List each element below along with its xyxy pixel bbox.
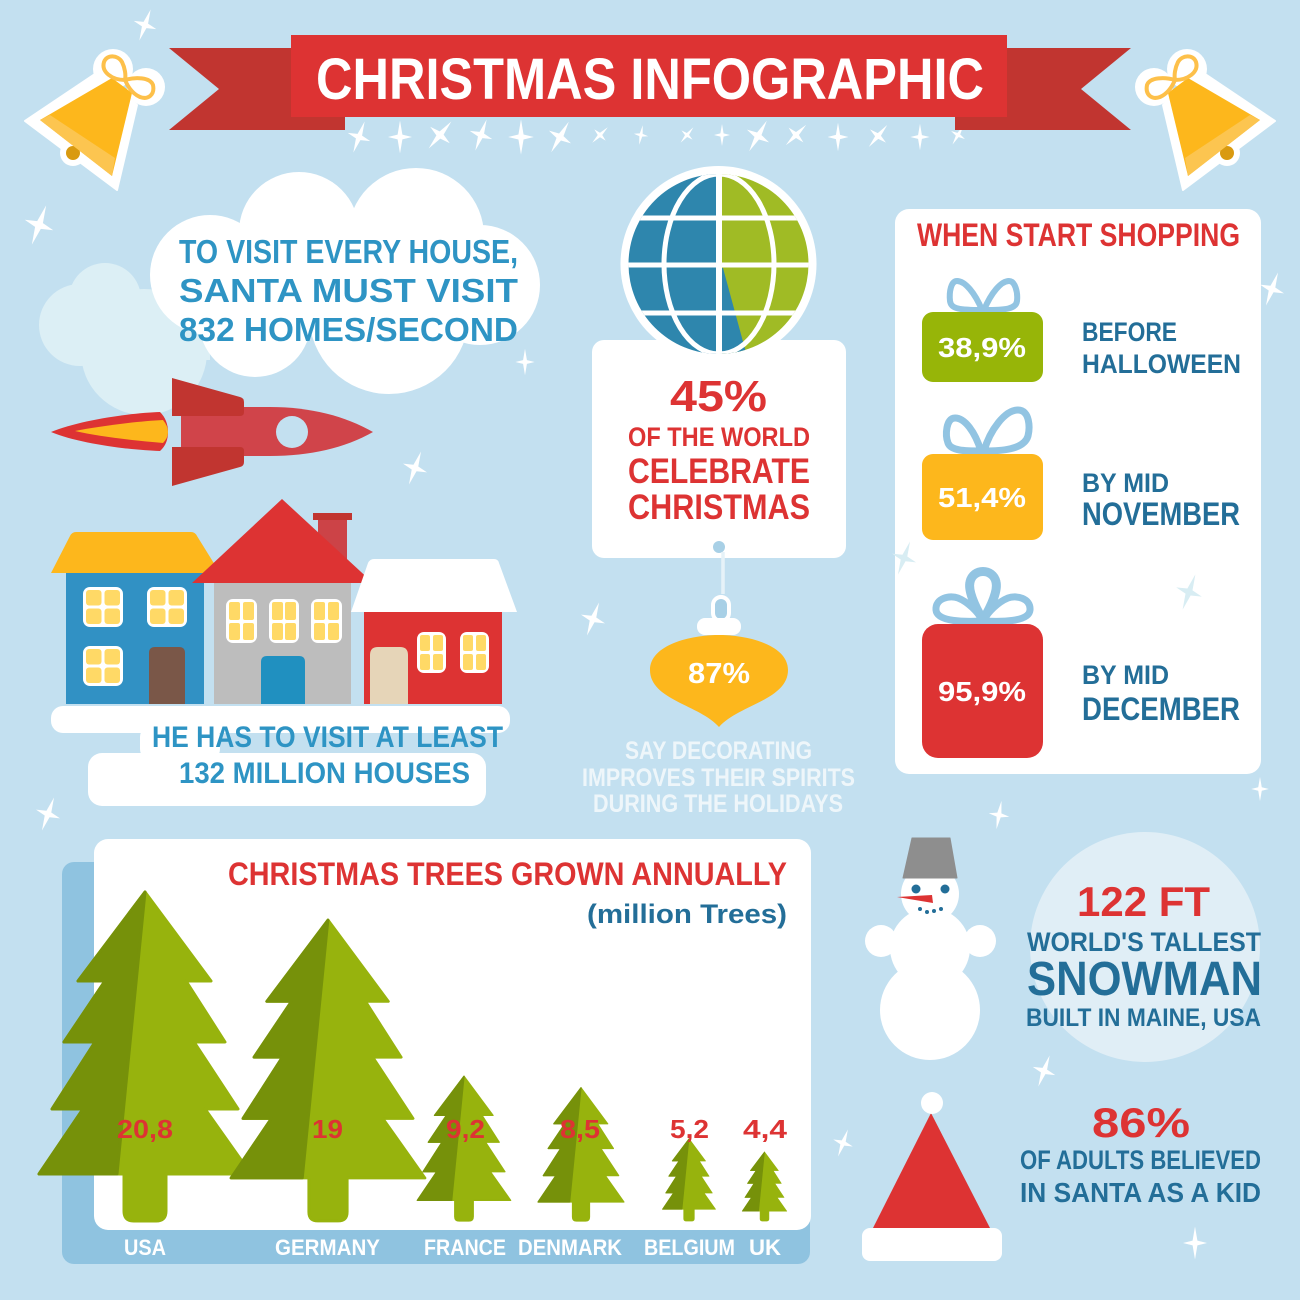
text: 45 percent: CELEBRATE: [628, 452, 810, 491]
snow ground: [51, 706, 510, 806]
tree values: 8,5: [560, 1114, 600, 1144]
text: decorating: [582, 737, 855, 818]
icon: right bell: [1135, 49, 1275, 190]
tree: Denmark: [538, 1088, 624, 1221]
country labels: USA: [124, 1235, 166, 1260]
blue house: [51, 532, 215, 704]
cloud with Santa speed text: SANTA MUST VISIT: [179, 272, 518, 309]
icon: rocket: [51, 378, 373, 486]
country labels: DENMARK: [518, 1235, 622, 1260]
country labels: BELGIUM: [644, 1235, 735, 1260]
text: decorating: IMPROVES THEIR SPIRITS: [582, 764, 855, 792]
gift: before halloween: BEFORE: [1082, 317, 1177, 347]
panel: tallest snowman circle: [1026, 832, 1262, 1062]
country labels: UK: [749, 1235, 781, 1260]
gift: by mid december: 95,9%: [938, 676, 1026, 707]
icon: ornament: 87%: [688, 658, 750, 690]
gift: by mid november: BY MID: [1082, 468, 1169, 498]
text: adults believed in santa: IN SANTA AS A KID: [1020, 1177, 1261, 1208]
red house: [351, 559, 517, 704]
heading: WHEN START SHOPPING: [917, 217, 1240, 253]
tree: France: [417, 1076, 511, 1221]
text: adults believed in santa: [1020, 1099, 1261, 1208]
tree: Germany: [231, 920, 425, 1221]
tree values: [117, 1114, 788, 1144]
panel: world celebration: [592, 166, 846, 558]
tree values: 19: [312, 1114, 343, 1144]
pale stars over shopping panel: [886, 537, 1208, 614]
gift: before halloween: [922, 281, 1241, 382]
gift: by mid november: NOVEMBER: [1082, 496, 1240, 532]
tree values: 5,2: [670, 1114, 709, 1144]
icon: left bell: [25, 49, 165, 190]
chart heading: CHRISTMAS TREES GROWN ANNUALLY: [228, 856, 787, 892]
text: 45 percent: [628, 372, 810, 527]
gift: before halloween: 38,9%: [938, 332, 1026, 363]
text: adults believed in santa: 86%: [1092, 1099, 1190, 1146]
gift: before halloween: HALLOWEEN: [1082, 349, 1241, 379]
cloud with Santa speed text: TO VISIT EVERY HOUSE,: [179, 233, 518, 270]
tree: USA: [39, 892, 251, 1221]
tree values: 20,8: [117, 1114, 173, 1144]
country labels: [124, 1235, 781, 1260]
gift: by mid december: BY MID: [1082, 660, 1169, 690]
gift: by mid november: [922, 410, 1240, 540]
panel: tallest snowman circle: BUILT IN MAINE, USA: [1026, 1004, 1261, 1032]
icon: snowman: [865, 838, 996, 1060]
panel: christmas trees chart: [39, 839, 811, 1264]
country labels: FRANCE: [424, 1235, 506, 1260]
text: houses to visit: 132 MILLION HOUSES: [179, 757, 470, 790]
gift: by mid december: DECEMBER: [1082, 691, 1240, 727]
background cloud: [39, 263, 210, 415]
cloud with Santa speed text: 832 HOMES/SECOND: [179, 311, 518, 348]
cloud with Santa speed text: [150, 168, 540, 394]
chart subheading: (million Trees): [587, 899, 787, 929]
houses: [51, 499, 517, 806]
tree: UK: [742, 1152, 787, 1221]
panel: tallest snowman circle: WORLD'S TALLEST: [1027, 927, 1261, 957]
tree: Belgium: [662, 1139, 716, 1221]
text: decorating: DURING THE HOLIDAYS: [593, 790, 843, 818]
text: decorating: SAY DECORATING: [625, 737, 812, 765]
text: 45 percent: OF THE WORLD: [628, 422, 810, 452]
gray house: [192, 499, 373, 704]
text: houses to visit: HE HAS TO VISIT AT LEAST: [152, 721, 503, 754]
tree values: 9,2: [446, 1114, 485, 1144]
title ribbon: [169, 35, 1131, 130]
text: 45 percent: 45%: [670, 372, 767, 421]
country labels: GERMANY: [275, 1235, 380, 1260]
icon: santa hat: [862, 1092, 1002, 1261]
gift: by mid november: 51,4%: [938, 482, 1026, 513]
panel: when start shopping: [895, 209, 1261, 774]
gift: by mid december: [922, 572, 1240, 758]
text: 45 percent: CHRISTMAS: [628, 488, 810, 527]
panel: tallest snowman circle: 122 FT: [1077, 878, 1210, 925]
panel: tallest snowman circle: SNOWMAN: [1027, 953, 1262, 1006]
tree values: 4,4: [743, 1114, 788, 1144]
text: houses to visit: [152, 721, 503, 790]
icon: ornament: [650, 541, 788, 727]
title: CHRISTMAS INFOGRAPHIC: [316, 47, 984, 112]
icon: globe: [620, 166, 819, 362]
